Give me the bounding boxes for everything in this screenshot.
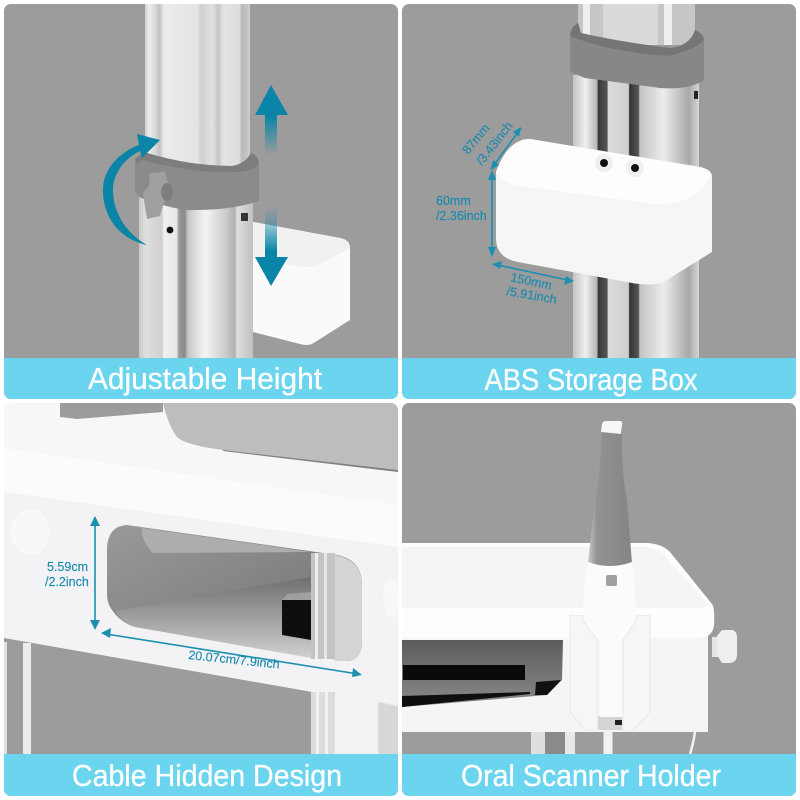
arrow: rotate knob [103,134,160,245]
shelf knobs [10,509,399,618]
clamp knob [143,172,173,219]
oral scanner [583,421,636,717]
cart legs [531,730,575,754]
caption bar [402,358,796,399]
box screw holes [595,154,644,177]
caption bar [4,754,398,796]
upper aluminium pole [145,4,250,170]
dimension: width: /5.91inch [505,284,558,307]
dimension: height: /2.36inch [436,209,487,223]
shelf front panel [4,630,398,706]
dimension: slot width [101,628,362,677]
pole mounting holes [165,213,248,235]
caption: Oral Scanner Holder [461,758,721,793]
legs and poles [4,642,398,754]
panel: ABS storage box [402,4,796,399]
caption bar [4,358,398,399]
pole hole [694,91,698,99]
panel: adjustable height [4,4,398,399]
dimension: slot height: 5.59cm [47,560,88,574]
caption: ABS Storage Box [484,362,698,397]
dimension: width: 150mm [509,270,553,293]
tray right knob [712,630,737,663]
dimension: width [492,261,574,307]
dimension: height [436,170,496,257]
panel: oral scanner holder [402,403,796,796]
upper pole [603,4,658,45]
dimension: depth [462,123,522,170]
drawer opening [402,640,563,707]
lower aluminium pole [139,195,253,365]
dimension: slot width: 20.07cm/7.9inch [188,648,280,672]
dimension: height: 60mm [436,194,471,208]
panel: cable hidden design [4,403,399,796]
chrome lower pole [573,75,699,365]
grey pole clamp [135,153,259,210]
arrow: height down [255,208,288,286]
holder clips [570,615,650,731]
grey clamp [570,23,704,88]
tray underside [402,636,708,732]
dimension: slot height [45,516,100,630]
white storage box [253,222,350,345]
shelf edge [4,448,398,550]
caption: Adjustable Height [88,361,322,396]
tray [402,543,714,638]
caption bar [402,754,796,796]
cables [604,732,696,754]
cable slot [107,525,362,661]
lower background [4,630,398,796]
grey object on shelf [60,403,163,419]
caption: Cable Hidden Design [72,758,342,793]
white storage box [496,139,712,284]
dimension: depth: /3.43inch [473,119,516,168]
dimension: depth: 87mm [460,121,493,157]
scanner base [598,716,622,730]
dimension: slot height: /2.2inch [45,575,89,589]
arrow: height up [255,85,288,155]
